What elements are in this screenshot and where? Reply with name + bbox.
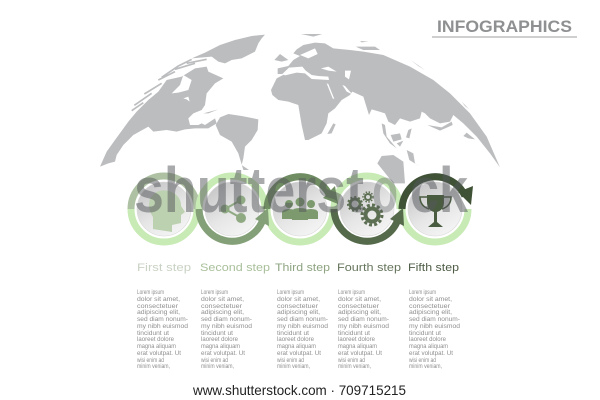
text column 1: Lorem ipsum: [137, 289, 164, 296]
text column 1: wisi enim ad: [136, 357, 164, 364]
ring arcs: [131, 176, 468, 242]
hudson bay: [172, 75, 192, 93]
text column 4: consectetuer: [338, 303, 380, 310]
text column 4: adipiscing elit,: [338, 309, 381, 316]
text column 3: minim veniam,: [277, 363, 310, 370]
red sea: [327, 83, 334, 99]
icon: people: [282, 198, 318, 220]
icon: trophy: [420, 195, 451, 227]
baltic sea: [300, 48, 318, 58]
text column 5: consectetuer: [409, 303, 451, 310]
text column 2: consectetuer: [201, 303, 243, 310]
text column 1: erat volutpat. Ut: [137, 350, 181, 357]
step circles chain: [131, 176, 473, 242]
text column 3: laoreet dolore: [277, 336, 314, 343]
australia: [377, 155, 405, 183]
label: third step: Third step: [275, 262, 330, 274]
cuba: [203, 109, 218, 113]
ring arrowheads: [255, 186, 473, 226]
text column 3: sed diam nonum-: [277, 316, 328, 323]
text column 4: laoreet dolore: [338, 336, 375, 343]
text column 3: tincidunt ut: [277, 330, 309, 337]
watermark: shutterst: [134, 154, 364, 226]
text column 2: adipiscing elit,: [201, 309, 244, 316]
text column 2: minim veniam,: [201, 363, 234, 370]
watermark: o: [372, 154, 398, 226]
mediterranean: [282, 67, 329, 80]
text column 3: erat volutpat. Ut: [277, 350, 321, 357]
black sea: [321, 67, 337, 72]
asia pacific islands: [377, 60, 475, 183]
british isles: [274, 54, 288, 62]
label: fifth step: Fifth step: [408, 262, 459, 274]
text column 2: laoreet dolore: [201, 336, 238, 343]
text column 1: minim veniam,: [137, 363, 170, 370]
text column 4: [337, 289, 389, 370]
text column 3: my nibh euismod: [277, 323, 328, 330]
arctic islands: [132, 59, 207, 111]
text column 2: magna aliquam: [201, 343, 240, 350]
text column 3: wisi enim ad: [276, 357, 304, 364]
text column 1: [136, 289, 188, 370]
text column 4: Lorem ipsum: [338, 289, 365, 296]
footer url: www.shutterstock.com · 709715215: [192, 382, 406, 398]
text column 3: magna aliquam: [277, 343, 316, 350]
text column 4: minim veniam,: [338, 363, 371, 370]
text column 5: [408, 289, 460, 370]
text column 1: magna aliquam: [137, 343, 176, 350]
text column 2: my nibh euismod: [201, 323, 252, 330]
text column 5: dolor sit amet,: [409, 296, 452, 303]
south america: [216, 114, 258, 170]
text column 5: adipiscing elit,: [409, 309, 452, 316]
text column 1: dolor sit amet,: [137, 296, 180, 303]
text column 4: dolor sit amet,: [338, 296, 381, 303]
text column 3: [276, 289, 328, 370]
text column 5: tincidunt ut: [409, 330, 441, 337]
text column 5: Lorem ipsum: [409, 289, 436, 296]
text column 5: magna aliquam: [409, 343, 448, 350]
watermark: ck: [410, 154, 468, 226]
text column 4: magna aliquam: [338, 343, 377, 350]
text column 1: my nibh euismod: [137, 323, 188, 330]
icon: gears: [348, 192, 382, 225]
label: first step: First step: [137, 262, 191, 274]
text column 5: wisi enim ad: [408, 357, 436, 364]
step labels: [137, 262, 459, 274]
persian gulf: [342, 85, 352, 94]
text column 4: sed diam nonum-: [338, 316, 389, 323]
icon: head: [149, 190, 185, 232]
text column 1: adipiscing elit,: [137, 309, 180, 316]
text column 2: erat volutpat. Ut: [201, 350, 245, 357]
north america: [100, 67, 223, 167]
text column 5: minim veniam,: [409, 363, 442, 370]
northern islands: [301, 34, 380, 50]
text column 2: dolor sit amet,: [201, 296, 244, 303]
text column 5: laoreet dolore: [409, 336, 446, 343]
text column 2: wisi enim ad: [200, 357, 228, 364]
eurasia and africa: [271, 34, 500, 167]
text column 4: wisi enim ad: [337, 357, 365, 364]
text column 5: erat volutpat. Ut: [409, 350, 453, 357]
greenland: [192, 35, 265, 63]
text column 5: sed diam nonum-: [409, 316, 460, 323]
caspian sea: [345, 71, 351, 79]
text column 3: dolor sit amet,: [277, 296, 320, 303]
text column 1: consectetuer: [137, 303, 179, 310]
text column 3: adipiscing elit,: [277, 309, 320, 316]
great lakes: [183, 97, 190, 102]
text column 1: sed diam nonum-: [137, 316, 188, 323]
title: infographics: INFOGRAPHICS: [437, 17, 572, 36]
text column 3: Lorem ipsum: [277, 289, 304, 296]
text column 4: erat volutpat. Ut: [338, 350, 382, 357]
text column 2: Lorem ipsum: [201, 289, 228, 296]
discs: [137, 182, 462, 236]
world map: [100, 34, 500, 183]
text column 4: tincidunt ut: [338, 330, 370, 337]
icon: share network: [222, 196, 245, 222]
madagascar: [327, 123, 336, 134]
text column 2: [200, 289, 252, 370]
text column 1: laoreet dolore: [137, 336, 174, 343]
text column 3: consectetuer: [277, 303, 319, 310]
label: second step: Second step: [200, 262, 270, 274]
americas and greenland: [100, 35, 265, 170]
text column 1: tincidunt ut: [137, 330, 169, 337]
text column 5: my nibh euismod: [409, 323, 460, 330]
text column 4: my nibh euismod: [338, 323, 389, 330]
text column 2: tincidunt ut: [201, 330, 233, 337]
text column 2: sed diam nonum-: [201, 316, 252, 323]
label: fourth step: Fourth step: [337, 262, 401, 274]
